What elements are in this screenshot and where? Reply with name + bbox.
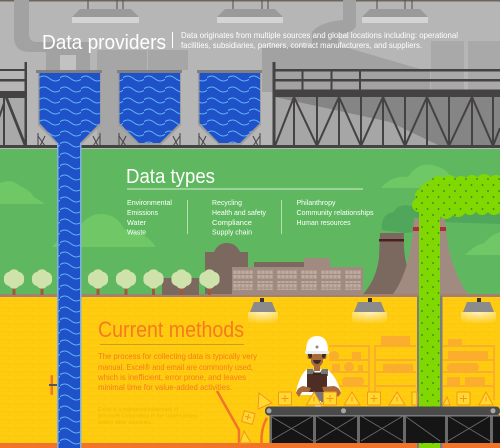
chute: orange slide (217, 391, 239, 444)
cloud: centre (52, 214, 156, 247)
text: current methods description: minimal time for value-added activities. (98, 382, 232, 392)
worker (296, 336, 341, 407)
text: current methods description: manual. Excel® and email are commonly used, (98, 362, 253, 372)
text: current methods description (97, 351, 258, 392)
list: data types column 3: Community relationships (296, 208, 374, 217)
text: current methods description: The process for collecting data is typically very (98, 351, 258, 361)
heading: data providers: Data providers (42, 31, 166, 54)
text: trademark footnote: Excel is a registered trademark of (98, 407, 178, 413)
divider: data types (127, 188, 363, 190)
boxes and warning triangles on belt (278, 392, 493, 405)
divider: column 2 (281, 200, 282, 234)
smoke: green dotted plume (412, 174, 500, 220)
list: data types column 1 (127, 198, 172, 236)
text: trademark footnote (98, 407, 198, 426)
divider: column 1 (187, 200, 188, 234)
panel: data providers background (0, 0, 500, 149)
cloud left (0, 181, 45, 204)
dark smoke (382, 205, 500, 233)
shelves: background (329, 336, 494, 400)
text: data providers description: Data originates from multiple sources and global locations including: operational (181, 30, 458, 40)
cooling tower: tall (393, 218, 468, 294)
walkway floor beam (0, 145, 500, 148)
list: data types column 1: Emissions (127, 208, 158, 217)
cloud: right bottom (465, 232, 500, 255)
list: data types column 2: Compliance (212, 218, 252, 227)
hopper: left (36, 70, 102, 146)
text: data providers description (181, 30, 458, 50)
walkway: right truss (272, 62, 500, 146)
factory buildings (162, 243, 363, 295)
conveyor base (270, 415, 500, 443)
pipe: green data pipe (417, 212, 442, 448)
list: data types column 2: Recycling (212, 198, 242, 207)
list: data types column 2 (212, 198, 266, 236)
divider: heading (172, 32, 173, 48)
heading: data types: Data types (126, 165, 215, 188)
list: data types column 1: Waste (127, 228, 146, 236)
list: data types column 1: Water (127, 218, 146, 227)
hopper: middle (117, 70, 182, 146)
divider: current methods (100, 344, 244, 345)
list: data types column 2: Health and safety (212, 208, 266, 217)
list: data types column 3: Human resources (296, 218, 351, 227)
ceiling lamps: factory floor (248, 298, 496, 324)
trees (4, 269, 220, 295)
panel: current methods background (0, 294, 500, 448)
pipe: blue data pipe (57, 143, 82, 448)
conveyor belt (265, 406, 500, 416)
list: data types column 3 (296, 198, 374, 227)
text: trademark footnote: Microsoft Corporation in the United States (98, 414, 198, 420)
text: data providers description: facilities, subsidiaries, partners, contract manufacturers, and suppliers. (181, 40, 422, 50)
cooling tower: short (363, 233, 408, 294)
chute: short curve (261, 418, 267, 443)
list: data types column 2: Supply chain (212, 228, 252, 236)
falling boxes and triangles (240, 393, 272, 443)
wall marker (49, 375, 57, 395)
hopper: right (197, 70, 262, 146)
ceiling lamps: top (72, 0, 428, 23)
list: data types column 3: Philanthropy (296, 198, 336, 207)
text: trademark footnote: and/or other countries. (98, 420, 152, 426)
list: data types column 1: Environmental (127, 198, 172, 207)
panel: data types background (0, 149, 500, 296)
text: current methods description: which is inefficient, error prone, and leaves (97, 372, 246, 382)
heading: current methods: Current methods (98, 317, 244, 342)
walkway: left railing (0, 62, 27, 146)
cloud: right top (381, 164, 450, 188)
